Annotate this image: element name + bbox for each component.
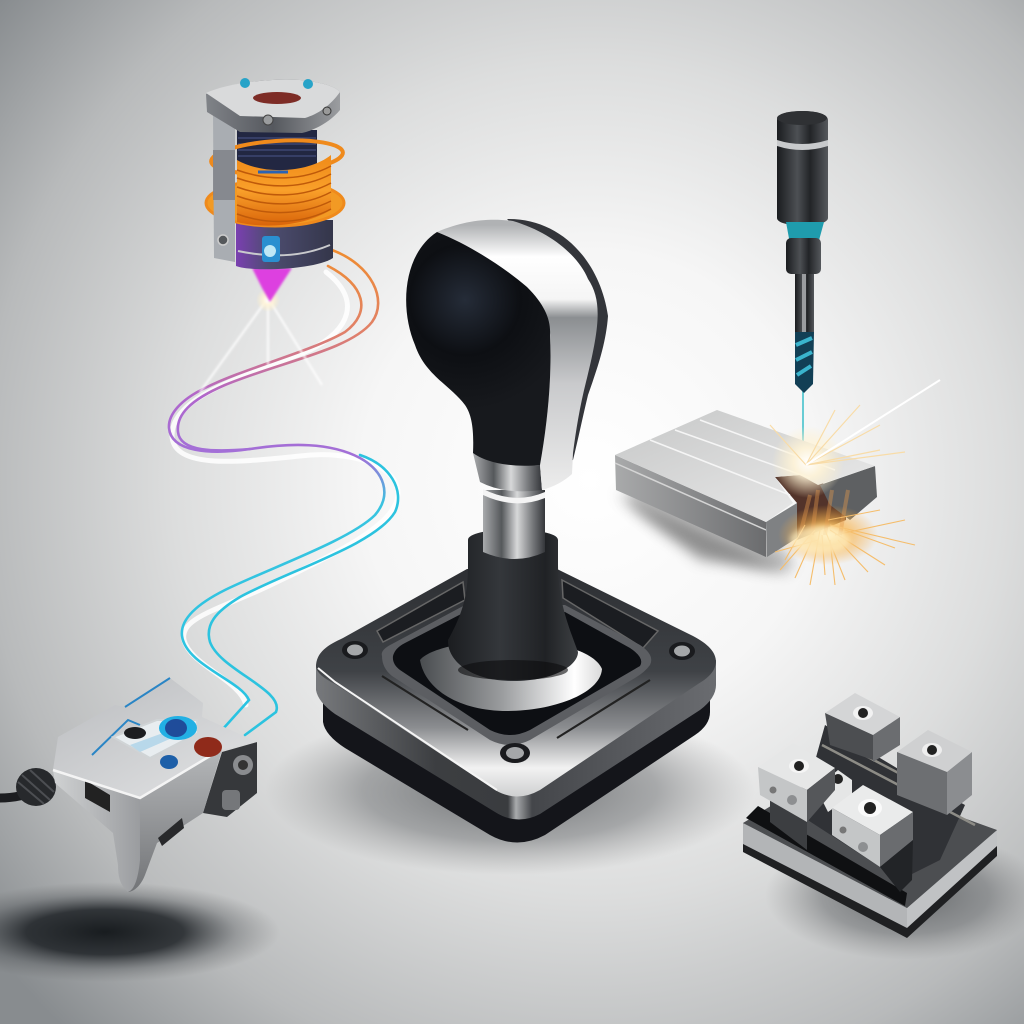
CNC end mill	[777, 111, 828, 465]
wire: orange to purple	[178, 250, 378, 450]
shank	[795, 274, 814, 332]
floor shadows	[0, 473, 1024, 982]
nozzle plume	[252, 268, 292, 302]
cyan collar	[786, 222, 824, 244]
base top face	[316, 569, 716, 796]
lower channel lines	[382, 676, 650, 738]
shaft	[483, 490, 545, 559]
knob chrome panel	[437, 220, 598, 490]
wire: purple to cyan	[169, 266, 384, 730]
knob black	[406, 232, 551, 466]
gear shift joystick	[316, 219, 716, 842]
flange silver ring	[420, 640, 602, 711]
strain relief	[16, 768, 56, 806]
base right strip	[907, 830, 997, 928]
notch interior	[775, 475, 846, 540]
metal block being cut	[615, 380, 940, 585]
knob dark trim	[507, 219, 608, 462]
base side	[316, 660, 716, 820]
sparks glow	[778, 505, 878, 565]
blue knob	[159, 716, 197, 740]
block end face	[766, 503, 797, 557]
laser beams	[200, 298, 322, 392]
base bottom dark edge	[743, 823, 997, 938]
white ring	[483, 489, 545, 503]
block shadow	[615, 492, 790, 570]
right block	[897, 730, 972, 815]
spark rays	[775, 510, 915, 585]
side bracket	[213, 113, 235, 262]
base front strip	[743, 823, 907, 928]
blue clip	[258, 170, 288, 174]
inset panel	[113, 720, 198, 758]
block back end	[820, 466, 877, 520]
block front-left face	[615, 455, 766, 557]
cut rays	[770, 405, 905, 465]
collet	[786, 238, 821, 274]
LED	[262, 236, 280, 262]
block top	[615, 410, 875, 522]
right face	[128, 750, 222, 892]
laser line	[802, 385, 804, 465]
back block	[825, 693, 900, 762]
glossy tube reflection	[172, 272, 398, 705]
knob collar	[473, 453, 542, 491]
rim highlight	[318, 668, 497, 790]
recess	[382, 605, 651, 745]
cut flash	[772, 426, 844, 498]
nozzle glow	[256, 288, 280, 312]
black underside	[323, 695, 710, 842]
upper holder	[777, 111, 828, 226]
rear mechanism	[800, 725, 965, 880]
right side mechanism	[203, 742, 257, 817]
boot base shadow	[458, 660, 568, 680]
fixture vise blocks	[743, 693, 997, 938]
boot	[448, 530, 578, 681]
blue button	[160, 755, 178, 769]
top seams	[92, 678, 170, 755]
lower body	[236, 220, 333, 269]
controller device	[0, 678, 257, 892]
wires: fibre paths from print head to controller	[169, 250, 398, 735]
left block with side tab	[758, 743, 852, 850]
dark coil core	[237, 130, 317, 175]
top slots	[377, 582, 465, 642]
black oval	[124, 727, 146, 739]
flutes	[795, 332, 814, 393]
top face	[53, 678, 257, 798]
base floor	[743, 770, 997, 908]
cable	[0, 790, 40, 798]
3D print head	[200, 78, 344, 392]
right face slot	[158, 818, 184, 846]
front block	[832, 785, 913, 892]
upper orange ring	[210, 136, 344, 178]
top plate	[206, 80, 340, 133]
orange spool	[237, 155, 331, 226]
left face	[53, 770, 140, 892]
front trough	[746, 806, 907, 906]
red button	[194, 737, 222, 757]
wire: outer cyan	[209, 455, 398, 735]
screws	[342, 641, 695, 763]
lower orange ring	[206, 180, 344, 226]
